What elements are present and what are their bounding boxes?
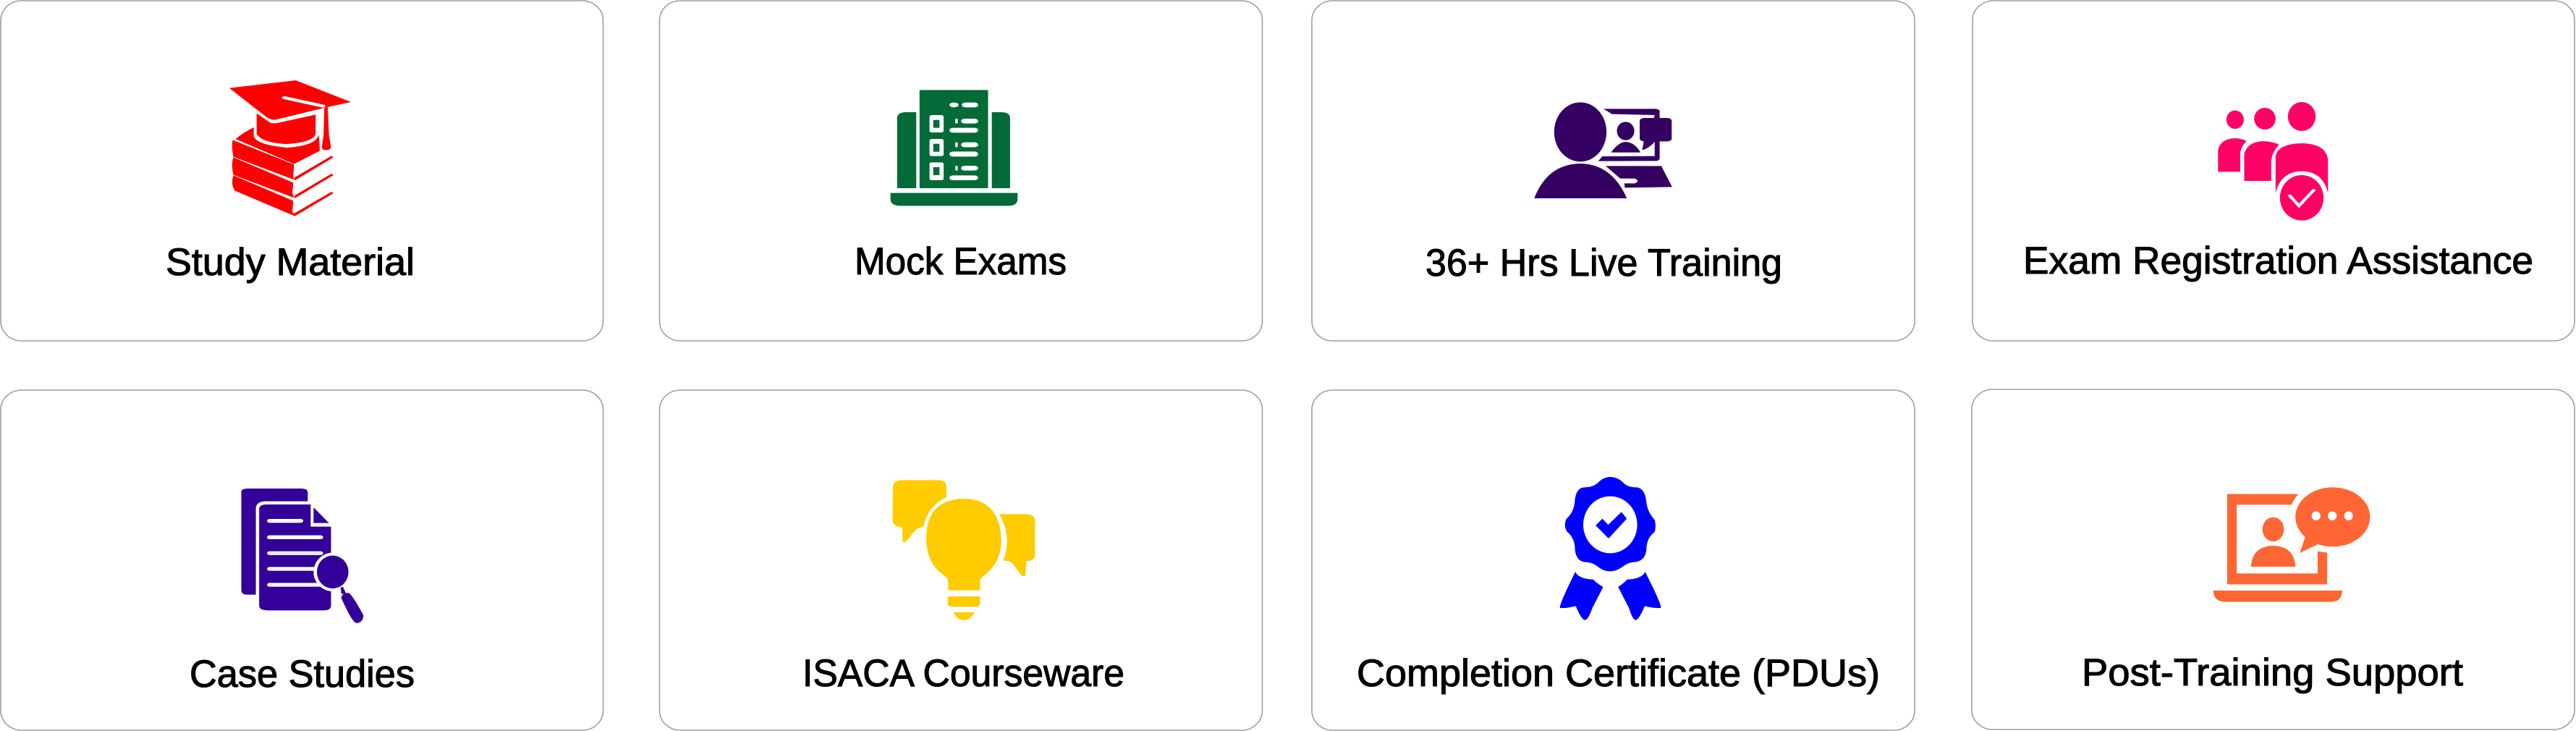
card outline [1972,389,2575,730]
label: Study Material: Study Material [166,241,415,284]
card outline [1312,390,1915,730]
label: Completion Certificate (PDUs): Completion Certificate (PDUs) [1357,652,1880,695]
icon: person at video call [1534,102,1672,198]
icon: graduation cap on books [229,80,351,216]
card outline [660,390,1262,730]
card outline [1,390,603,730]
icon: laptop with exam sheet [891,90,1017,206]
label: 36+ Hrs Live Training: 36+ Hrs Live Training [1425,242,1782,284]
panel: Completion Certificate (PDUs) [1312,390,1915,730]
panel: Exam Registration Assistance [1973,1,2575,341]
panel: Mock Exams [660,1,1262,341]
panel: Study Material [1,1,603,341]
panel: Post-Training Support [1972,389,2575,730]
label: Exam Registration Assistance: Exam Registration Assistance [2023,240,2533,282]
icon: group with check badge [2218,102,2328,221]
label: Post-Training Support: Post-Training Support [2082,651,2463,694]
label: Mock Exams: Mock Exams [855,240,1067,283]
icon: documents with magnifier [241,489,363,623]
card outline [1973,1,2575,341]
card outline [660,1,1262,341]
icon: light bulb with speech bubbles [892,480,1035,620]
panel: ISACA Courseware [660,390,1262,730]
panel: Case Studies [1,390,603,730]
card outline [1312,1,1915,341]
icon: award rosette with ribbons [1560,477,1661,620]
icon: laptop with person and speech bubble [2213,487,2370,602]
label: Case Studies: Case Studies [190,653,415,696]
card outline [1,1,603,341]
panel: 36+ Hrs Live Training [1312,1,1915,341]
label: ISACA Courseware: ISACA Courseware [802,652,1124,695]
